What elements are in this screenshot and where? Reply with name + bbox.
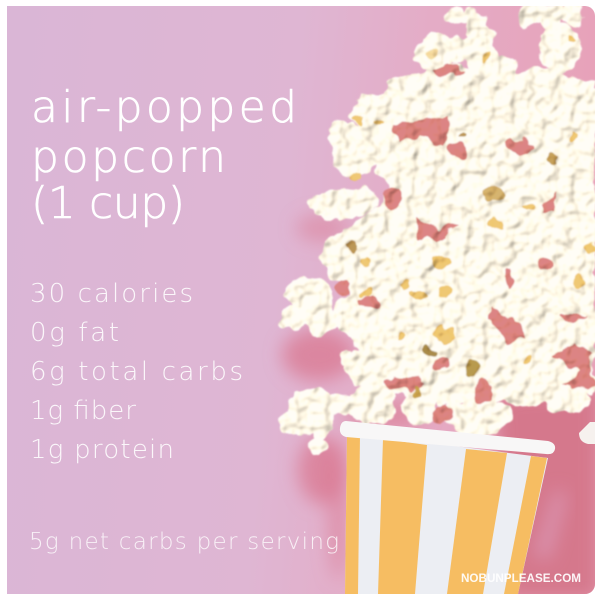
nutrition facts list: 1g protein	[30, 435, 174, 465]
title: (1 cup)	[31, 178, 185, 229]
nutrition facts list	[30, 279, 243, 465]
title	[31, 82, 297, 229]
nutrition facts list: 1g fiber	[30, 396, 136, 426]
popcorn pink gaps	[337, 66, 593, 423]
popcorn golden kernel hulls	[347, 35, 595, 398]
main popcorn mass	[338, 62, 595, 402]
nutrition facts list: 0g fat	[30, 318, 119, 348]
popcorn pile	[276, 1, 600, 454]
cup yellow stripes	[345, 434, 547, 594]
nutrition facts list: 30 calories	[30, 279, 193, 309]
net carbs summary: 5g net carbs per serving	[29, 529, 339, 555]
cup body	[345, 432, 548, 594]
cup rim	[340, 421, 555, 454]
title: air-popped	[31, 82, 297, 133]
brand label: NOBUNPLEASE.COM	[461, 573, 581, 585]
popcorn kernels	[276, 1, 600, 454]
title: popcorn	[31, 132, 226, 183]
nutrition facts list: 6g total carbs	[30, 357, 243, 387]
stray kernel by cup	[579, 422, 595, 444]
paper cup	[340, 421, 555, 594]
